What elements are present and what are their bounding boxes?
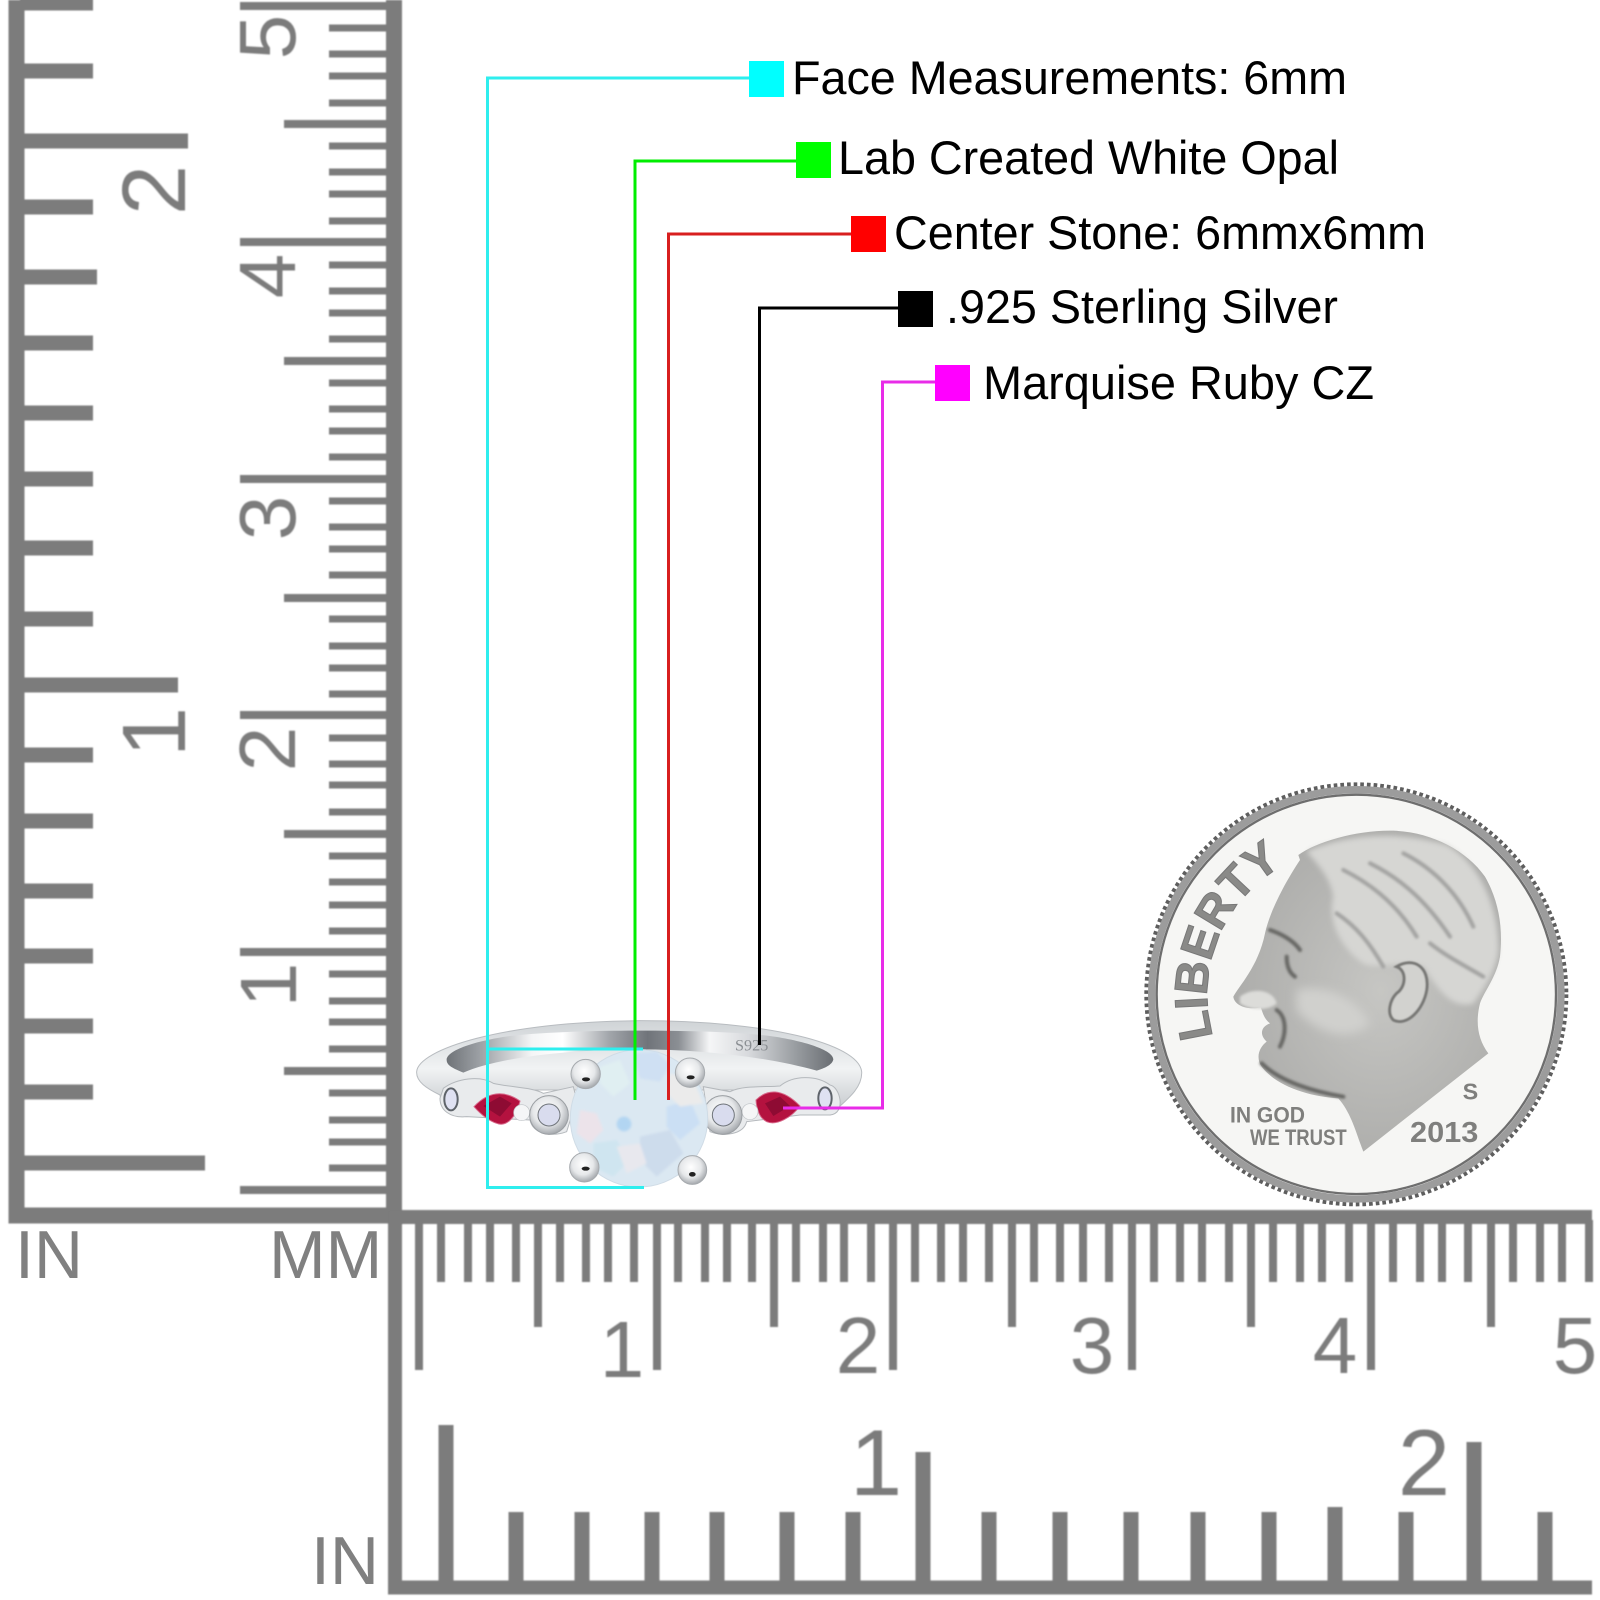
dime coin <box>1144 782 1568 1206</box>
opal centre stone <box>570 1050 708 1187</box>
bottom ruler numerals: 2 <box>1398 1410 1450 1515</box>
left ruler numerals: 3 <box>223 496 312 540</box>
leader: sterling silver <box>760 291 933 1045</box>
leader: face measurements <box>488 61 784 1188</box>
bottom horizontal ruler <box>395 1217 1592 1588</box>
bottom ruler numerals: 1 <box>600 1305 644 1394</box>
LIBERTY inscription: LIBERTY <box>1174 838 1274 1040</box>
millimetre medium and long ticks <box>240 6 390 1190</box>
IN GOD WE TRUST inscription: IN GOD <box>1230 1102 1305 1127</box>
left ruler numerals: 5 <box>223 15 312 59</box>
left ruler numerals: 1 <box>105 707 205 757</box>
millimetre short ticks <box>329 28 390 1168</box>
bottom ruler numerals: 5 <box>1553 1301 1597 1390</box>
label: marquise ruby: Marquise Ruby CZ <box>983 356 1374 409</box>
mint mark S: S <box>1463 1078 1478 1104</box>
unit label: IN, left ruler: IN <box>15 1217 83 1293</box>
inner band shading with hallmark: S925 <box>735 1038 768 1055</box>
label: sterling silver: .925 Sterling Silver <box>946 280 1338 333</box>
unit label: MM: MM <box>269 1217 382 1293</box>
left ruler numerals: 2 <box>105 165 205 215</box>
inner band shading with hallmark <box>447 1031 833 1073</box>
left ruler numerals: 1 <box>224 963 313 1007</box>
date 2013: 2013 <box>1410 1117 1478 1149</box>
inch scale ticks <box>20 3 205 1163</box>
label: white opal: Lab Created White Opal <box>838 131 1339 184</box>
ruler frame <box>16 0 394 1216</box>
portrait of Roosevelt <box>1233 831 1501 1152</box>
label: face measurements: Face Measurements: 6mm <box>792 51 1347 104</box>
IN GOD WE TRUST inscription <box>1230 1102 1347 1150</box>
millimetre short ticks <box>441 1220 1589 1282</box>
bottom ruler numerals: 1 <box>850 1410 902 1515</box>
label: center stone: Center Stone: 6mmx6mm <box>894 206 1426 259</box>
bottom ruler numerals: 4 <box>1313 1301 1357 1390</box>
left ruler numerals <box>105 15 313 1007</box>
four prongs <box>570 1058 707 1184</box>
left ruler numerals: 4 <box>223 254 312 298</box>
millimetre medium and long ticks <box>419 1220 1491 1370</box>
inch scale ticks <box>446 1425 1545 1581</box>
IN GOD WE TRUST inscription: WE TRUST <box>1250 1125 1347 1150</box>
ring band <box>417 1021 862 1117</box>
leader: marquise ruby <box>783 365 970 1108</box>
ring illustration <box>417 1021 862 1187</box>
left ruler numerals: 2 <box>223 727 312 771</box>
coin field and rim <box>1146 784 1566 1204</box>
bottom ruler numerals: 2 <box>836 1301 880 1390</box>
bottom ruler numerals: 3 <box>1070 1301 1114 1390</box>
leader: white opal <box>635 142 831 1100</box>
left side setting <box>440 1079 577 1134</box>
right side setting <box>703 1078 840 1134</box>
unit label: IN, bottom ruler: IN <box>311 1523 379 1599</box>
bottom ruler numerals <box>600 1301 1597 1515</box>
leader: center stone <box>668 216 886 1100</box>
ruler frame <box>395 1217 1592 1588</box>
left vertical ruler <box>16 0 394 1216</box>
